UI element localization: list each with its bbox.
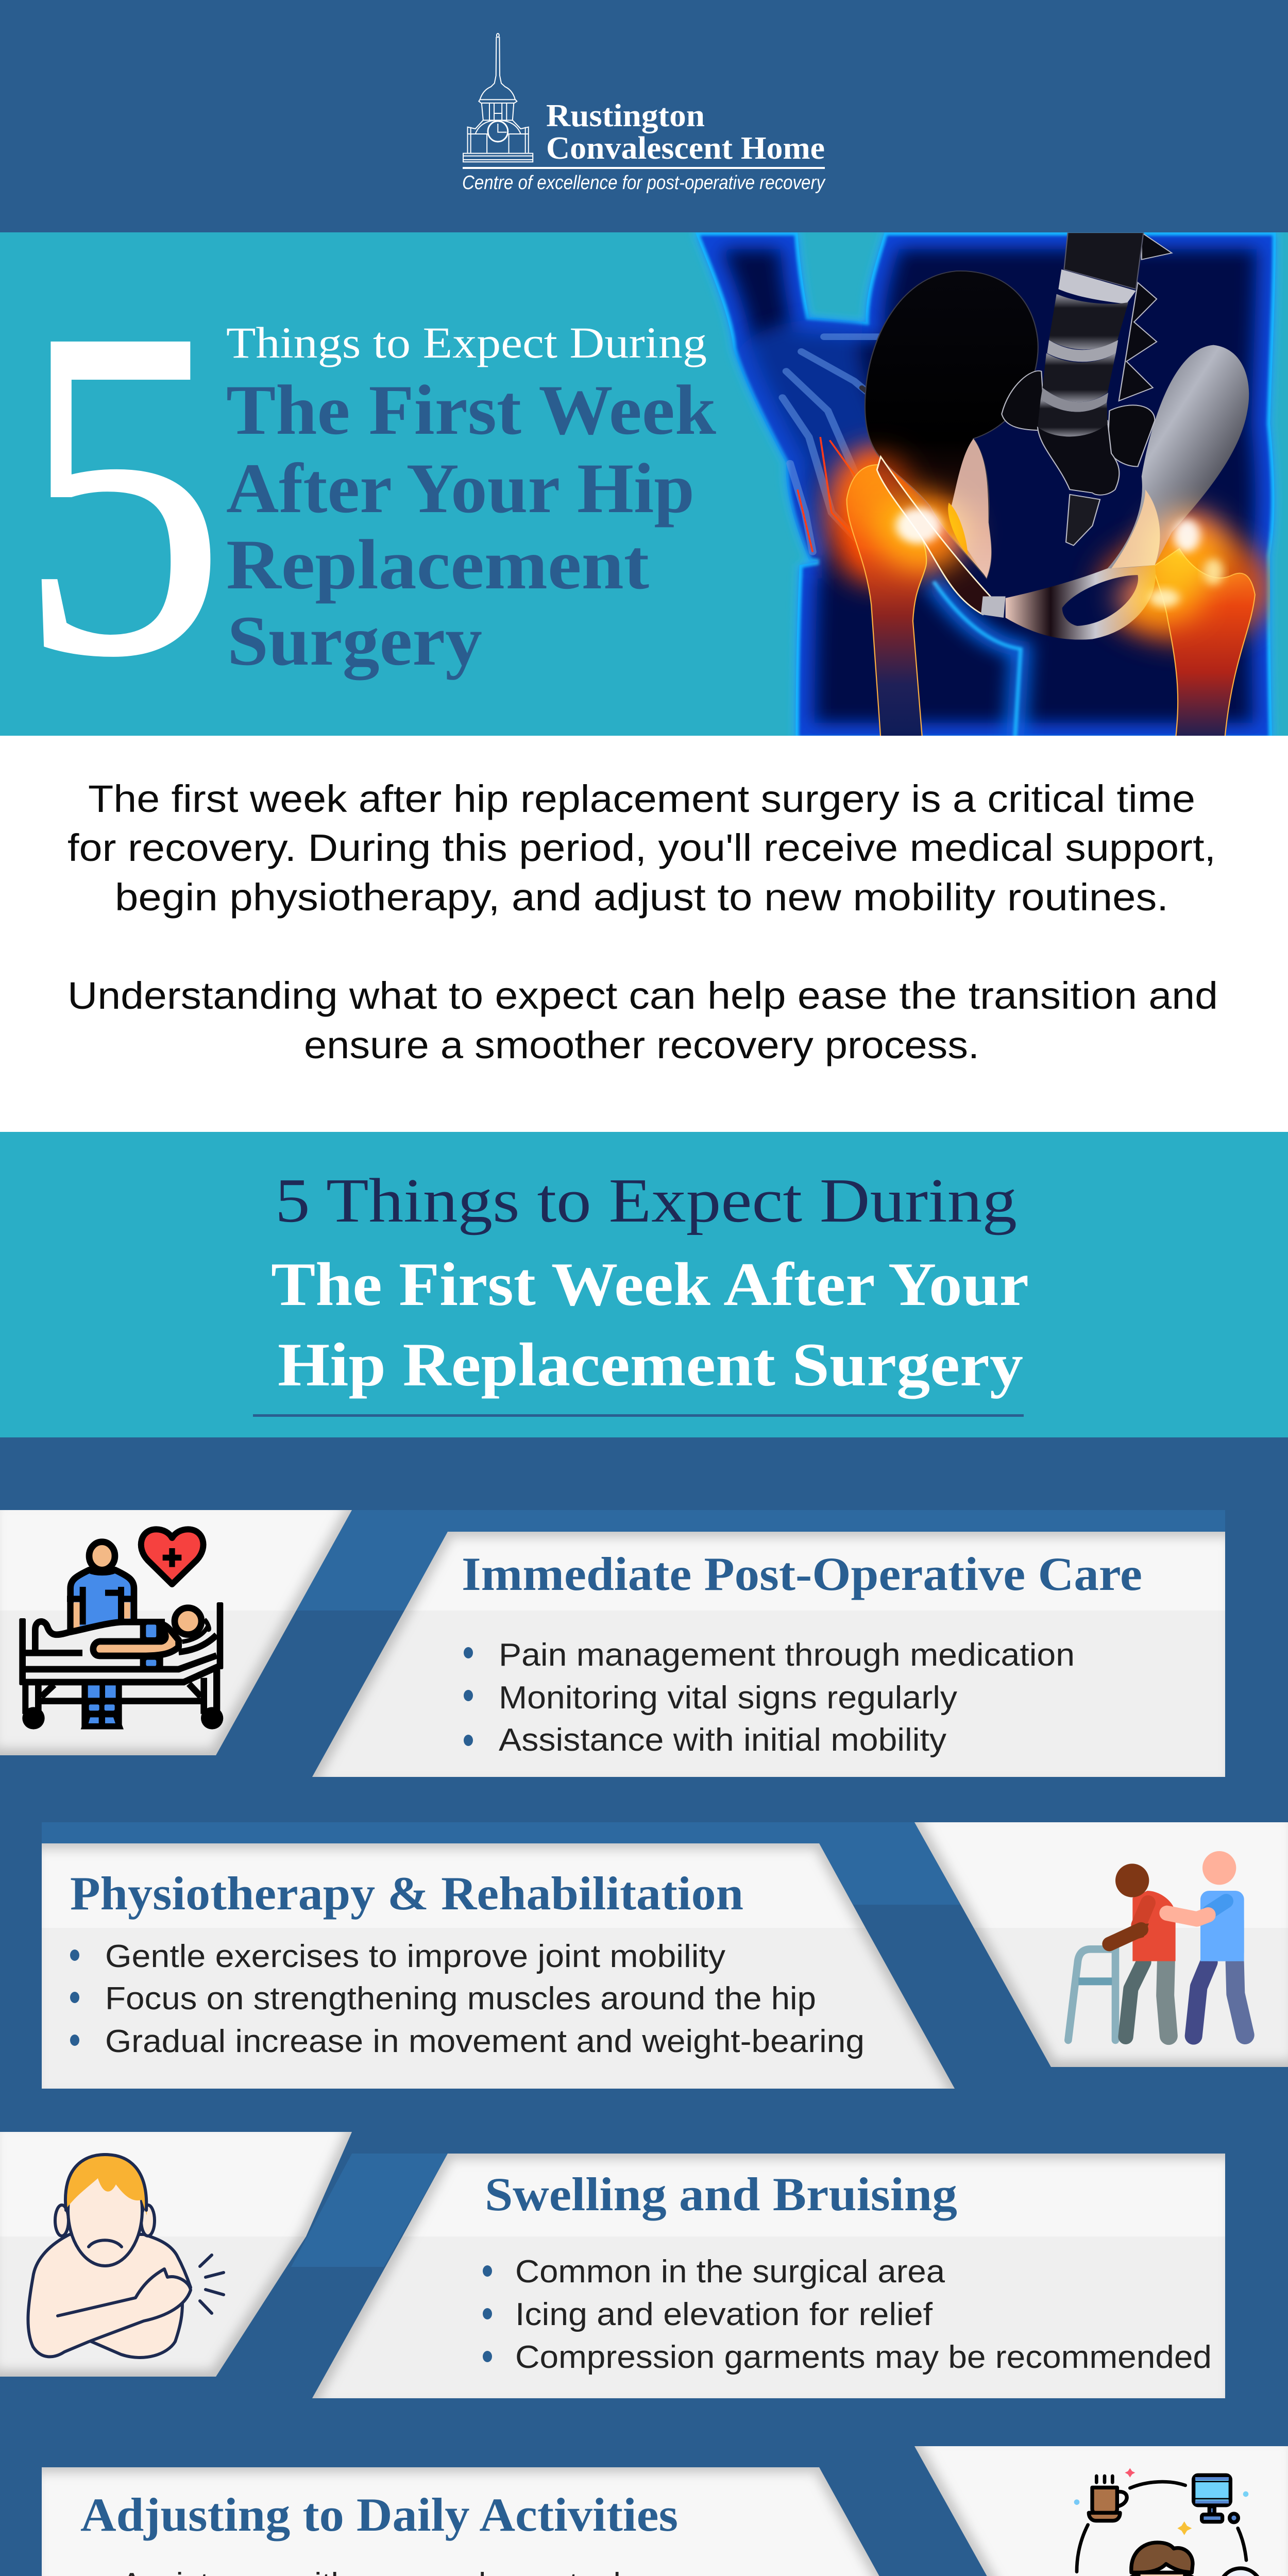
icon panel xyxy=(0,1510,352,1755)
bullet list: Gentle exercises to improve joint mobility xyxy=(105,1939,725,1974)
icon panel xyxy=(914,1822,1288,2067)
hero title: Replacement xyxy=(226,525,649,604)
section heading band xyxy=(0,1132,1288,1437)
section heading band: The First Week After Your xyxy=(271,1250,1029,1318)
bullet list: Focus on strengthening muscles around the hip xyxy=(105,1981,816,2016)
heading: Immediate Post-Operative Care xyxy=(462,1548,1142,1600)
hero panel xyxy=(0,227,1288,753)
hero title: Things to Expect During xyxy=(226,318,707,367)
heading: Swelling and Bruising xyxy=(485,2168,957,2221)
logo xyxy=(462,33,826,194)
intro panel xyxy=(0,736,1288,1132)
text panel xyxy=(42,2467,955,2576)
header band xyxy=(0,0,1288,232)
logo: Convalescent Home xyxy=(546,131,825,166)
intro panel: Understanding what to expect can help ease the transition and xyxy=(67,974,1218,1017)
card 4: adjusting to daily activities xyxy=(42,2446,1288,2576)
card 2: physiotherapy and rehabilitation xyxy=(42,1822,1288,2089)
card 1: immediate post-operative care xyxy=(0,1510,1225,1777)
bullet list: Pain management through medication xyxy=(499,1637,1075,1673)
hero title: After Your Hip xyxy=(226,449,694,528)
hero title: Surgery xyxy=(227,601,482,680)
navy background for cards xyxy=(0,1437,1288,2576)
intro panel: ensure a smoother recovery process. xyxy=(304,1024,979,1066)
icon: carer helping patient with walking frame xyxy=(1068,1851,1245,2040)
text panel xyxy=(312,1532,1225,1777)
bullet list: Gradual increase in movement and weight-bearing xyxy=(105,2024,865,2059)
bullet list: Icing and elevation for relief xyxy=(515,2297,933,2332)
icon: clock tower xyxy=(463,33,533,162)
hero title: The First Week xyxy=(226,370,716,449)
bullet list xyxy=(483,2254,1212,2375)
bullet list: Common in the surgical area xyxy=(515,2254,945,2290)
intro panel: begin physiotherapy, and adjust to new mobility routines. xyxy=(115,876,1168,919)
card 3: swelling and bruising xyxy=(0,2132,1225,2398)
hero image: glowing pelvis x-ray xyxy=(688,227,1288,752)
heading: Adjusting to Daily Activities xyxy=(80,2488,678,2541)
bullet list: Assistance with initial mobility xyxy=(499,1722,946,1758)
icon: person holding sore arm xyxy=(28,2155,224,2358)
text panel xyxy=(42,1843,955,2089)
icon: daily activities around a person xyxy=(1062,2468,1262,2576)
logo: Rustington xyxy=(546,98,705,133)
section heading band: Hip Replacement Surgery xyxy=(278,1330,1023,1399)
section heading band: 5 Things to Expect During xyxy=(275,1166,1017,1235)
intro panel: for recovery. During this period, you'll receive medical support, xyxy=(67,826,1216,869)
bullet list: Monitoring vital signs regularly xyxy=(499,1680,957,1716)
text panel xyxy=(312,2154,1225,2398)
icon: patient in hospital bed with carer xyxy=(19,1529,223,1730)
logo: Centre of excellence for post-operative recovery xyxy=(462,172,826,194)
big number 5: 5 xyxy=(19,232,225,753)
bullet list xyxy=(464,1637,1075,1758)
hero title xyxy=(226,318,716,680)
bullet list xyxy=(70,1939,865,2059)
intro panel: The first week after hip replacement surgery is a critical time xyxy=(88,777,1195,820)
bullet list: Compression garments may be recommended xyxy=(515,2340,1212,2375)
icon panel xyxy=(914,2446,1288,2576)
heading: Physiotherapy & Rehabilitation xyxy=(70,1867,743,1920)
icon panel xyxy=(0,2132,352,2377)
